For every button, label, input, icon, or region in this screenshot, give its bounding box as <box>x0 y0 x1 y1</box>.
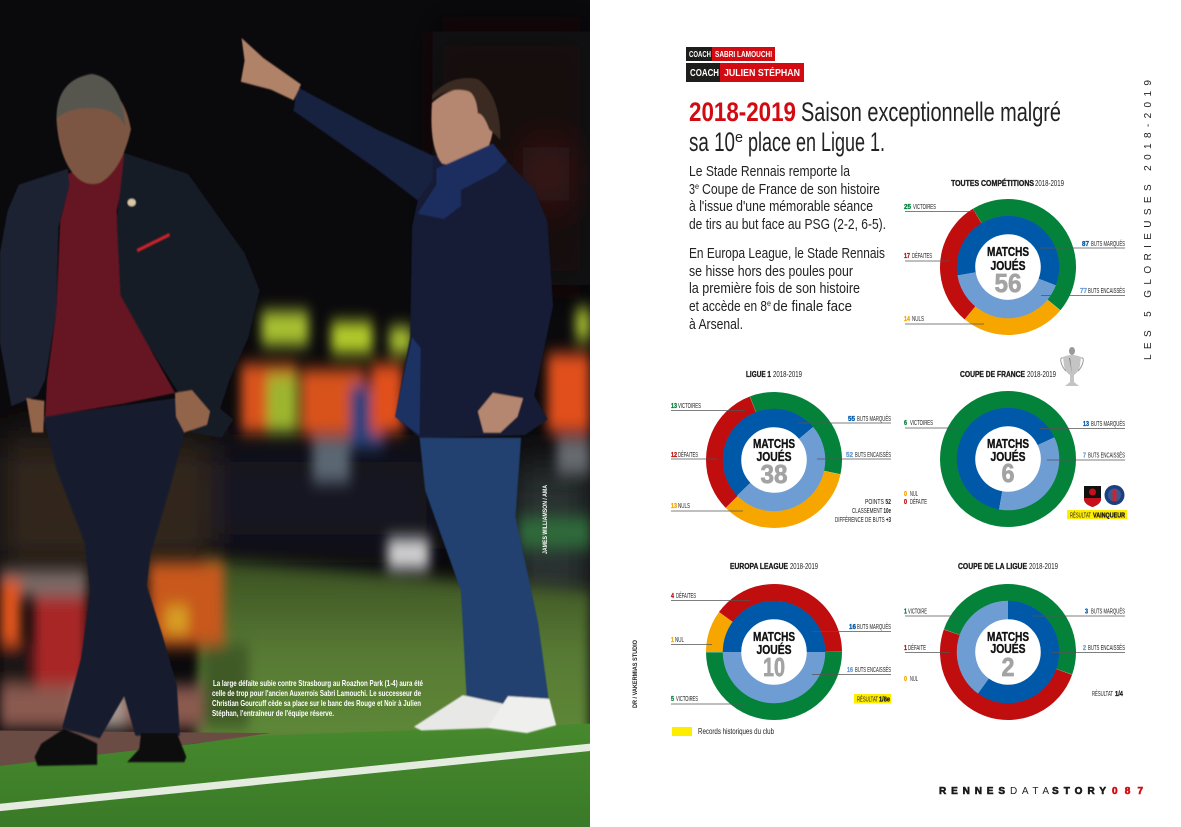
center: matchs joués 10: JOUÉS <box>756 642 792 657</box>
intro text: à Arsenal. <box>689 316 743 333</box>
title <box>689 97 1061 157</box>
footer: rennes data story 087: 087 <box>1112 786 1143 797</box>
pitch background <box>196 559 590 749</box>
center: matchs joués 56: JOUÉS <box>990 258 1026 273</box>
label: 87 buts marqués <box>1040 239 1125 248</box>
heading: coupe de france: 2018-2019 <box>1027 370 1056 379</box>
donut: europa league <box>691 569 857 735</box>
label: 3 buts marqués <box>1032 606 1125 616</box>
donut: ligue 1 <box>690 376 858 544</box>
label: 5 victoires: VICTOIRES <box>676 696 698 703</box>
center: matchs joués 6: MATCHS <box>987 436 1029 451</box>
result badge: 1/8e: 1/8e <box>879 696 890 704</box>
photo caption <box>212 678 423 718</box>
heading: coupe de france: COUPE DE FRANCE <box>960 370 1026 379</box>
donut: coupe de france <box>948 400 1068 518</box>
center: matchs joués 38: JOUÉS <box>756 449 792 464</box>
label: 1 défaite: DÉFAITE <box>908 643 926 652</box>
label: 77 buts encaissés: 77 <box>1080 288 1087 295</box>
coach tag: Sabri Lamouchi: SABRI LAMOUCHI <box>715 50 772 59</box>
label: 1 nul: 1 <box>671 637 674 644</box>
track strip <box>0 730 271 770</box>
panel: coupe de france <box>904 347 1127 520</box>
label: 4 défaites: 4 <box>671 593 674 600</box>
intro text: e <box>767 299 771 308</box>
ligue 1 stats: POINTS 52 <box>865 499 891 506</box>
result badge: 1/8e <box>854 694 891 704</box>
heading: europa league: EUROPA LEAGUE <box>730 562 789 571</box>
label: 16 buts encaissés: 16 <box>847 667 853 674</box>
label: 0 nul <box>904 676 918 683</box>
label: 3 buts marqués: 3 <box>1085 608 1088 616</box>
center: matchs joués 2 <box>987 629 1029 682</box>
title: e <box>735 129 743 146</box>
result badge: 1/8e: RÉSULTAT <box>857 694 878 704</box>
label: 55 buts marqués: BUTS MARQUÉS <box>857 414 891 423</box>
intro text: Coupe de France de son histoire <box>702 181 880 198</box>
label: 16 buts marqués: BUTS MARQUÉS <box>857 622 891 631</box>
intro text: 3 <box>689 181 695 198</box>
icon: trophy <box>1061 347 1083 386</box>
foreground grass <box>0 724 590 827</box>
ligue 1 stats: CLASSEMENT 10e <box>852 508 891 515</box>
photo caption: Stéphan, l'entraîneur de l'équipe réserve. <box>212 708 334 718</box>
label: 7 buts encaissés: 7 <box>1083 452 1086 460</box>
photo credit left: DR / VAKERMIAS STUDIO <box>632 640 639 708</box>
label: 7 buts encaissés: BUTS ENCAISSÉS <box>1088 450 1125 460</box>
label: 6 victoires: VICTOIRES <box>910 420 933 427</box>
label: 4 défaites <box>671 591 750 600</box>
label: 13 buts marqués <box>1040 419 1125 428</box>
label: 6 victoires <box>904 420 958 428</box>
label: 87 buts marqués: BUTS MARQUÉS <box>1091 239 1125 248</box>
panel: europa league <box>671 562 891 736</box>
center: matchs joués 2: MATCHS <box>987 629 1029 644</box>
intro text: à l'issue d'une mémorable séance <box>689 198 873 215</box>
center: matchs joués 38 <box>753 436 795 489</box>
label: 12 défaites: DÉFAITES <box>678 450 698 459</box>
label: 87 buts marqués: 87 <box>1082 241 1089 248</box>
coach tag: Julien Stéphan: COACH <box>690 68 719 79</box>
title: sa 10 <box>689 127 735 157</box>
label: 0 défaite: DÉFAITE <box>910 497 927 506</box>
label: 16 buts encaissés: BUTS ENCAISSÉS <box>855 665 891 674</box>
label: 55 buts marqués <box>798 414 891 423</box>
center: matchs joués 56: MATCHS <box>987 244 1029 259</box>
label: 0 nul <box>904 491 918 498</box>
label: 1 défaite <box>904 643 950 652</box>
coach tag: Julien Stéphan <box>686 63 804 82</box>
label: 1 nul: NUL <box>675 637 684 644</box>
footer: rennes data story 087: DATA <box>1010 786 1049 797</box>
intro text: En Europa League, le Stade Rennais <box>689 245 885 262</box>
label: 0 défaite <box>904 497 927 506</box>
coach tag: Julien Stéphan: JULIEN STÉPHAN <box>724 66 800 79</box>
label: 14 nuls: 14 <box>904 316 910 323</box>
touchline <box>0 744 590 811</box>
label: 17 défaites: DÉFAITES <box>912 251 932 260</box>
heading: ligue 1: 2018-2019 <box>773 370 802 379</box>
heading: coupe de la ligue: 2018-2019 <box>1029 562 1058 571</box>
heading: toutes compétitions: TOUTES COMPÉTITIONS <box>951 179 1035 188</box>
label: 5 victoires: 5 <box>671 696 674 703</box>
ligue 1 stats: DIFFÉRENCE DE BUTS +3 <box>835 515 891 524</box>
icon: Stade Rennais crest <box>1084 486 1101 507</box>
label: 7 buts encaissés <box>1047 450 1125 460</box>
label: 0 nul: NUL <box>910 491 918 498</box>
photo: coaches on the touchline <box>0 0 590 827</box>
label: 1 victoire: VICTOIRE <box>908 608 927 616</box>
label: 1 défaite: 1 <box>904 645 907 652</box>
footer: rennes data story 087: RENNES <box>939 786 1005 797</box>
title: place en Ligue 1. <box>748 127 885 157</box>
label: 4 défaites: DÉFAITES <box>676 591 696 600</box>
label: 6 victoires: 6 <box>904 420 907 427</box>
label: 2 buts encaissés: 2 <box>1083 645 1086 652</box>
ligue 1 stats <box>835 499 891 524</box>
center: matchs joués 56 <box>987 244 1029 298</box>
label: 0 nul: NUL <box>910 676 918 683</box>
label: 25 victoires: VICTOIRES <box>913 204 936 211</box>
center: matchs joués 2: 2 <box>1002 652 1014 682</box>
man right: Julien Stéphan <box>241 38 556 733</box>
intro text: de tirs au but face au PSG (2-2, 6-5). <box>689 216 886 233</box>
label: 16 buts marqués: 16 <box>849 624 856 631</box>
heading: ligue 1 <box>746 370 802 379</box>
title: Saison exceptionnelle malgré <box>801 97 1061 127</box>
label: 16 buts marqués <box>812 622 891 632</box>
center: matchs joués 6: JOUÉS <box>990 449 1026 464</box>
coach tag: Sabri Lamouchi: COACH <box>689 50 711 59</box>
photo caption: celle de trop pour l'ancien Auxerrois Sabri Lamouchi. Le successeur de <box>212 688 421 698</box>
label: 55 buts marqués: 55 <box>848 416 855 423</box>
footer: rennes data story 087: STORY <box>1052 786 1106 797</box>
label: 2 buts encaissés <box>1051 643 1125 652</box>
center: matchs joués 6: 6 <box>1002 458 1014 488</box>
panel: coupe de la ligue <box>904 562 1125 728</box>
heading: coupe de la ligue: COUPE DE LA LIGUE <box>958 562 1028 571</box>
label: 13 nuls <box>671 503 743 511</box>
legend: records historiques <box>672 726 774 736</box>
panel: toutes compétitions <box>904 179 1125 351</box>
label: 25 victoires <box>904 204 984 212</box>
label: 12 défaites <box>671 450 717 459</box>
result: 1/4: 1/4 <box>1115 691 1123 698</box>
label: 1 victoire: 1 <box>904 608 907 616</box>
label: 13 buts marqués: 13 <box>1083 421 1089 428</box>
label: 0 nul: 0 <box>904 676 907 683</box>
label: 5 victoires <box>671 696 745 704</box>
label: 25 victoires: 25 <box>904 204 911 211</box>
vertical section title: LES 5 GLORIEUSES 2018-2019 <box>1143 80 1154 360</box>
label: 17 défaites: 17 <box>904 253 910 260</box>
label: 14 nuls <box>904 316 984 324</box>
label: 2 buts encaissés: BUTS ENCAISSÉS <box>1088 643 1125 652</box>
label: 52 buts encaissés: 52 <box>846 452 853 459</box>
center: matchs joués 56: 56 <box>994 268 1022 298</box>
man left: Sabri Lamouchi <box>0 74 260 766</box>
label: 13 victoires: VICTOIRES <box>678 403 701 410</box>
result badge: vainqueur: RÉSULTAT <box>1070 510 1091 520</box>
label: 77 buts encaissés: BUTS ENCAISSÉS <box>1088 286 1125 295</box>
heading: toutes compétitions: 2018-2019 <box>1035 179 1064 188</box>
center: matchs joués 10: MATCHS <box>753 629 795 644</box>
center: matchs joués 38: MATCHS <box>753 436 795 451</box>
result: 1/4: RÉSULTAT <box>1092 689 1113 698</box>
footer: rennes data story 087 <box>939 786 1143 797</box>
center: matchs joués 6 <box>987 436 1029 488</box>
label: 13 nuls: NULS <box>678 503 690 510</box>
label: 17 défaites <box>904 251 950 261</box>
label: 0 défaite: 0 <box>904 499 907 506</box>
result badge: vainqueur <box>1067 510 1127 520</box>
icon: PSG crest <box>1104 485 1124 505</box>
label: 12 défaites: 12 <box>671 452 677 459</box>
center: matchs joués 38: 38 <box>760 459 788 489</box>
label: 52 buts encaissés <box>817 450 891 459</box>
photo caption: La large défaite subie contre Strasbourg au Roazhon Park (1-4) aura été <box>213 678 423 688</box>
label: 3 buts marqués: BUTS MARQUÉS <box>1091 606 1125 616</box>
title: 2018-2019 <box>689 97 796 127</box>
label: 0 nul: 0 <box>904 491 907 498</box>
coach tag: Sabri Lamouchi <box>686 47 775 61</box>
donut: toutes compétitions <box>924 183 1092 351</box>
center: matchs joués 10 <box>753 629 795 682</box>
panel: ligue 1 <box>671 370 891 544</box>
center: matchs joués 10: 10 <box>763 652 785 682</box>
label: 13 victoires <box>671 403 745 410</box>
legend: records historiques: Records historiques du club <box>698 726 774 736</box>
label: 1 nul <box>671 637 712 644</box>
label: 13 nuls: 13 <box>671 503 677 510</box>
photo credit right: JAMES WILLIAMSON / AMA <box>542 485 549 554</box>
label: 13 buts marqués: BUTS MARQUÉS <box>1091 419 1125 428</box>
result badge: vainqueur: VAINQUEUR <box>1093 512 1125 520</box>
intro text <box>689 163 886 333</box>
label: 1 victoire <box>904 608 960 616</box>
photo caption: Christian Gourcuff cède sa place sur le banc des Rouge et Noir à Julien <box>212 698 421 708</box>
heading: europa league: 2018-2019 <box>790 562 818 571</box>
intro text: Le Stade Rennais remporte la <box>689 163 851 180</box>
label: 16 buts encaissés <box>812 665 891 674</box>
intro text: e <box>695 182 699 191</box>
label: 14 nuls: NULS <box>912 316 924 323</box>
center: matchs joués 2: JOUÉS <box>990 641 1026 656</box>
intro text: de finale face <box>773 298 852 315</box>
label: 13 victoires: 13 <box>671 403 677 410</box>
donut: coupe de la ligue <box>932 576 1084 728</box>
intro text: la première fois de son histoire <box>689 280 860 297</box>
intro text: et accède en 8 <box>689 298 767 315</box>
label: 52 buts encaissés: BUTS ENCAISSÉS <box>855 450 891 459</box>
heading: ligue 1: LIGUE 1 <box>746 370 771 379</box>
intro text: se hisse hors des poules pour <box>689 263 853 280</box>
label: 77 buts encaissés <box>1041 286 1125 296</box>
